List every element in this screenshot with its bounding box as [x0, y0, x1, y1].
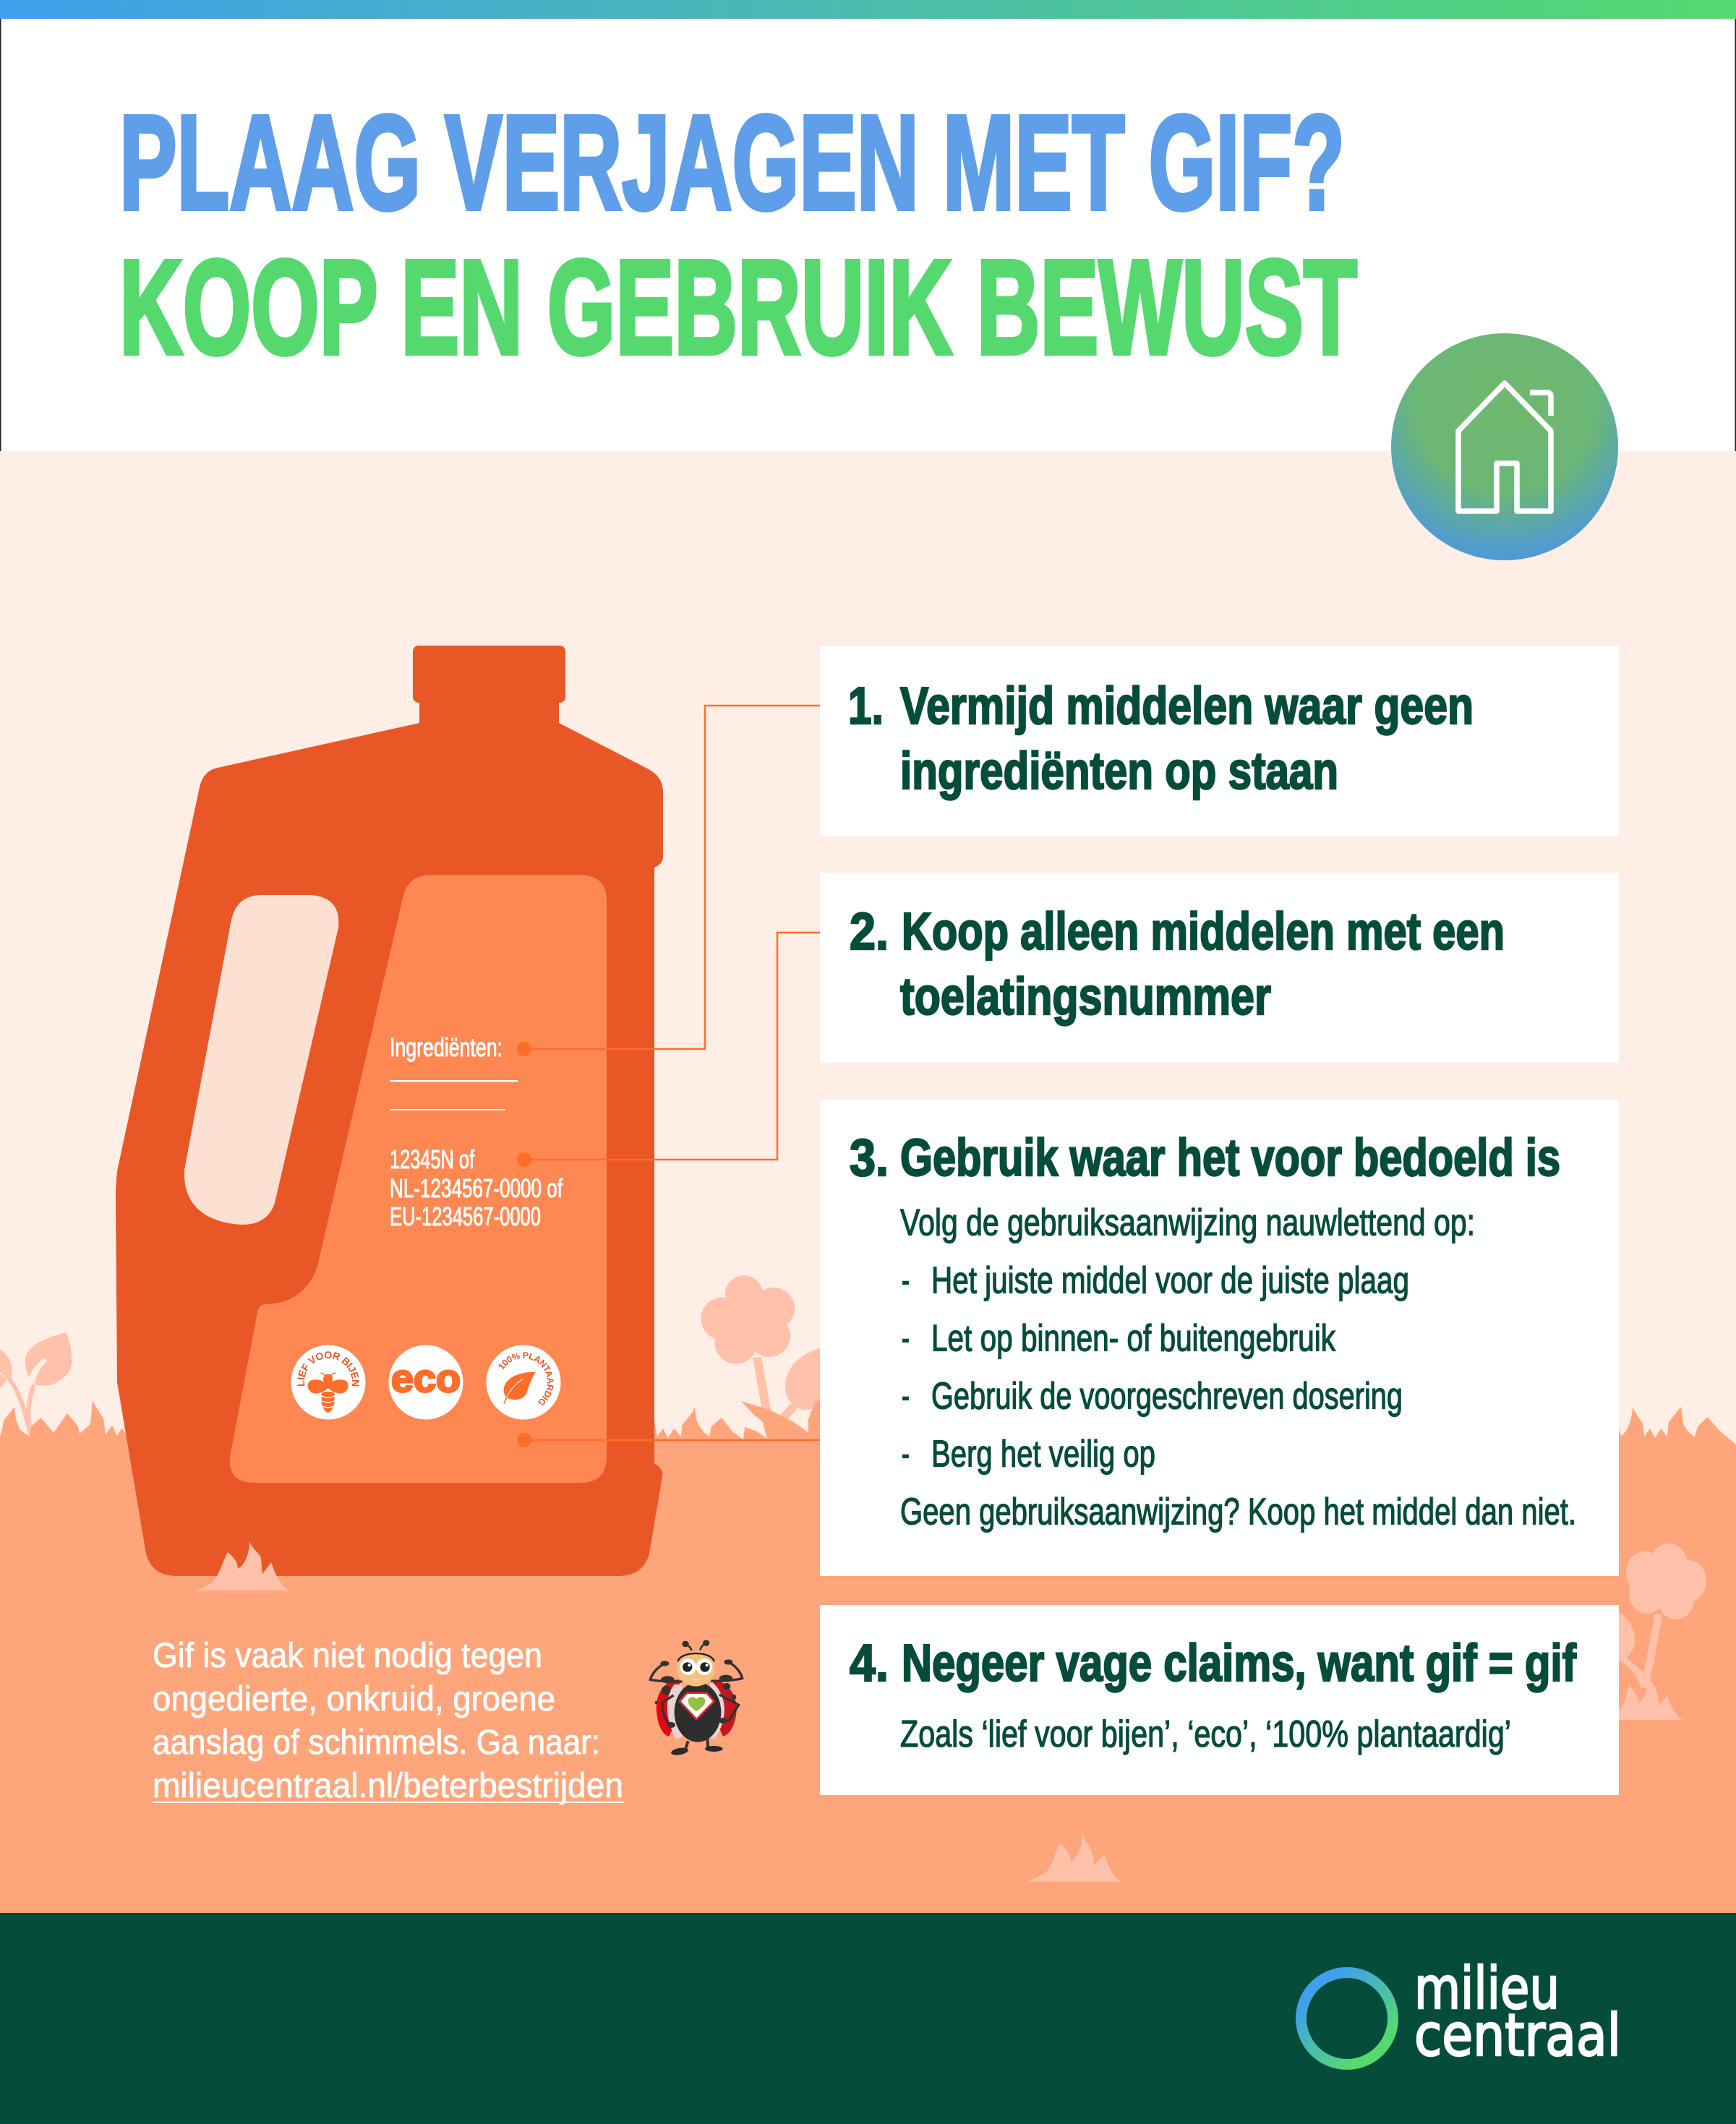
- connector: ingredients to tip 1: [517, 706, 821, 1056]
- panel: tip 4: Zoals ‘lief voor bijen’, ‘eco’, ‘100% plantaardig’: [900, 1713, 1511, 1755]
- label text: admission numbers: 12345N of: [390, 1144, 475, 1174]
- bottle cap: [413, 646, 565, 703]
- bottle label: [230, 875, 607, 1483]
- icon: house badge: [1391, 333, 1618, 560]
- panel: tip 2: [820, 873, 1619, 1063]
- badge: 100% plantaardig: 100% PLANTAARDIG: [499, 1352, 554, 1405]
- panel: tip 3: Het juiste middel voor de juiste plaag: [931, 1259, 1409, 1301]
- badge: lief voor bijen: [291, 1345, 366, 1420]
- panel: tip 4: [820, 1605, 1619, 1795]
- badge: eco: eco: [391, 1357, 461, 1400]
- label text: admission numbers: [390, 1144, 563, 1231]
- label text: admission numbers: NL-1234567-0000 of: [390, 1173, 563, 1203]
- peach background panel: [0, 451, 1736, 1463]
- panel: tip 2: Koop alleen middelen met een: [902, 903, 1505, 961]
- panel: tip 2: toelatingsnummer: [900, 968, 1271, 1026]
- panel: tip 3: [820, 1100, 1619, 1576]
- text block: advice with link: [153, 1637, 624, 1805]
- panel: tip 3: Berg het veilig op: [931, 1433, 1155, 1475]
- illustration: flower behind bottle: [701, 1275, 824, 1420]
- panel: tip 1: ingrediënten op staan: [900, 742, 1338, 800]
- illustration: right plant: [1618, 1543, 1706, 1720]
- text block: advice with link: aanslag of schimmels. Ga naar:: [153, 1723, 600, 1762]
- icon: ladybug mascot: [650, 1640, 743, 1756]
- panel: tip 4: 4.: [850, 1635, 889, 1692]
- illustration: small flame bottom centre: [1028, 1833, 1122, 1882]
- text block: advice with link: Gif is vaak niet nodig tegen: [153, 1637, 542, 1675]
- connector: number to tip 2: [517, 933, 821, 1167]
- badge: 100% plantaardig: [486, 1345, 561, 1420]
- footer: [0, 1913, 1736, 2124]
- logo wordmark: milieu: [1414, 1955, 1560, 2022]
- text block: advice with link: ongedierte, onkruid, groene: [153, 1680, 555, 1718]
- icon: leaf: [504, 1372, 536, 1404]
- ground with grass: [0, 1396, 1736, 1913]
- logo wordmark: centraal: [1414, 2002, 1621, 2069]
- badge: eco: [389, 1345, 463, 1420]
- title: [119, 88, 1357, 382]
- label text: admission numbers: EU-1234567-0000: [390, 1202, 541, 1231]
- logo: milieu centraal: [1301, 1955, 1621, 2069]
- text block: advice with link: milieucentraal.nl/beterbestrijden: [153, 1767, 623, 1805]
- icon: bee: [308, 1373, 349, 1413]
- connector: claims to tip 3: [517, 1433, 821, 1447]
- bottle body: [116, 701, 663, 1576]
- badge: lief voor bijen: LIEF VOOR BIJEN: [298, 1351, 359, 1387]
- bottle: [116, 646, 663, 1576]
- bottle handle opening: [184, 895, 338, 1225]
- panel: tip 1: [820, 646, 1619, 836]
- panel: tip 3: Volg de gebruiksaanwijzing nauwlettend op:: [900, 1202, 1475, 1243]
- panel: tip 2: 2.: [850, 903, 889, 961]
- panel: tip 1: Vermijd middelen waar geen: [900, 677, 1474, 735]
- panel: tip 3: -: [902, 1433, 910, 1475]
- panel: tip 3: 3.: [850, 1129, 889, 1187]
- panel: tip 1: 1.: [848, 677, 884, 735]
- label text: ingredients: Ingrediënten:: [390, 1032, 503, 1062]
- panel: tip 3: -: [902, 1317, 910, 1359]
- panel: tip 3: Gebruik de voorgeschreven dosering: [931, 1375, 1403, 1417]
- logo ring: [1301, 1972, 1393, 2065]
- panel: tip 4: Negeer vage claims, want gif = gif: [902, 1635, 1577, 1692]
- illustration: flame at bottle base: [196, 1541, 288, 1590]
- panel: tip 3: Let op binnen- of buitengebruik: [931, 1317, 1336, 1359]
- panel: tip 3: -: [902, 1375, 910, 1417]
- illustration: left plant: [0, 1332, 72, 1435]
- logo wordmark: [1414, 1955, 1621, 2069]
- top gradient bar: [0, 0, 1736, 19]
- panel: tip 3: Gebruik waar het voor bedoeld is: [900, 1129, 1560, 1187]
- panel: tip 3: -: [902, 1259, 910, 1301]
